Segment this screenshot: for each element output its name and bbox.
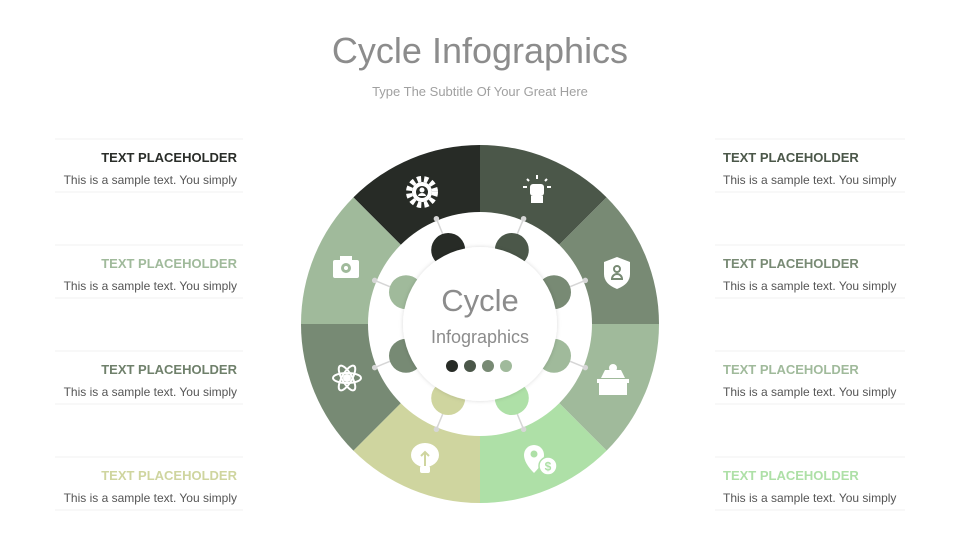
right text blocks: TEXT PLACEHOLDER bbox=[723, 256, 859, 271]
right text blocks: This is a sample text. You simply bbox=[723, 279, 896, 293]
left text blocks: TEXT PLACEHOLDER bbox=[101, 150, 238, 165]
left text blocks: This is a sample text. You simply bbox=[64, 491, 237, 505]
left text blocks: TEXT PLACEHOLDER bbox=[101, 256, 238, 271]
left text blocks: This is a sample text. You simply bbox=[64, 385, 237, 399]
subtitle: Type The Subtitle Of Your Great Here bbox=[372, 84, 588, 99]
right text blocks: TEXT PLACEHOLDER bbox=[723, 362, 859, 377]
icon: podium bbox=[597, 364, 629, 395]
cycle ring bbox=[301, 145, 659, 503]
title: Cycle Infographics bbox=[332, 30, 628, 71]
left text blocks: TEXT PLACEHOLDER bbox=[101, 362, 238, 377]
icon: shield person bbox=[604, 257, 630, 289]
right text blocks bbox=[715, 139, 905, 510]
right text blocks: TEXT PLACEHOLDER bbox=[723, 468, 859, 483]
icon: gear with person bbox=[409, 179, 435, 205]
right text blocks: This is a sample text. You simply bbox=[723, 385, 896, 399]
left text blocks: TEXT PLACEHOLDER bbox=[101, 468, 238, 483]
icon: atom bbox=[333, 363, 361, 393]
right text blocks: This is a sample text. You simply bbox=[723, 491, 896, 505]
center disk: Infographics bbox=[431, 327, 529, 347]
icon: brain bulb bbox=[411, 443, 439, 473]
right text blocks: This is a sample text. You simply bbox=[723, 173, 896, 187]
icon: idea hand bbox=[523, 175, 551, 203]
center disk bbox=[403, 247, 557, 401]
right text blocks: TEXT PLACEHOLDER bbox=[723, 150, 859, 165]
bumps bbox=[389, 233, 571, 415]
center disk: Cycle bbox=[441, 283, 519, 318]
left text blocks bbox=[55, 139, 243, 510]
left text blocks: This is a sample text. You simply bbox=[64, 279, 237, 293]
connectors bbox=[373, 217, 587, 431]
left text blocks: This is a sample text. You simply bbox=[64, 173, 237, 187]
icon: location dollar: $ bbox=[545, 460, 552, 474]
icon: location dollar bbox=[524, 445, 557, 475]
icon: camera bbox=[333, 256, 359, 278]
